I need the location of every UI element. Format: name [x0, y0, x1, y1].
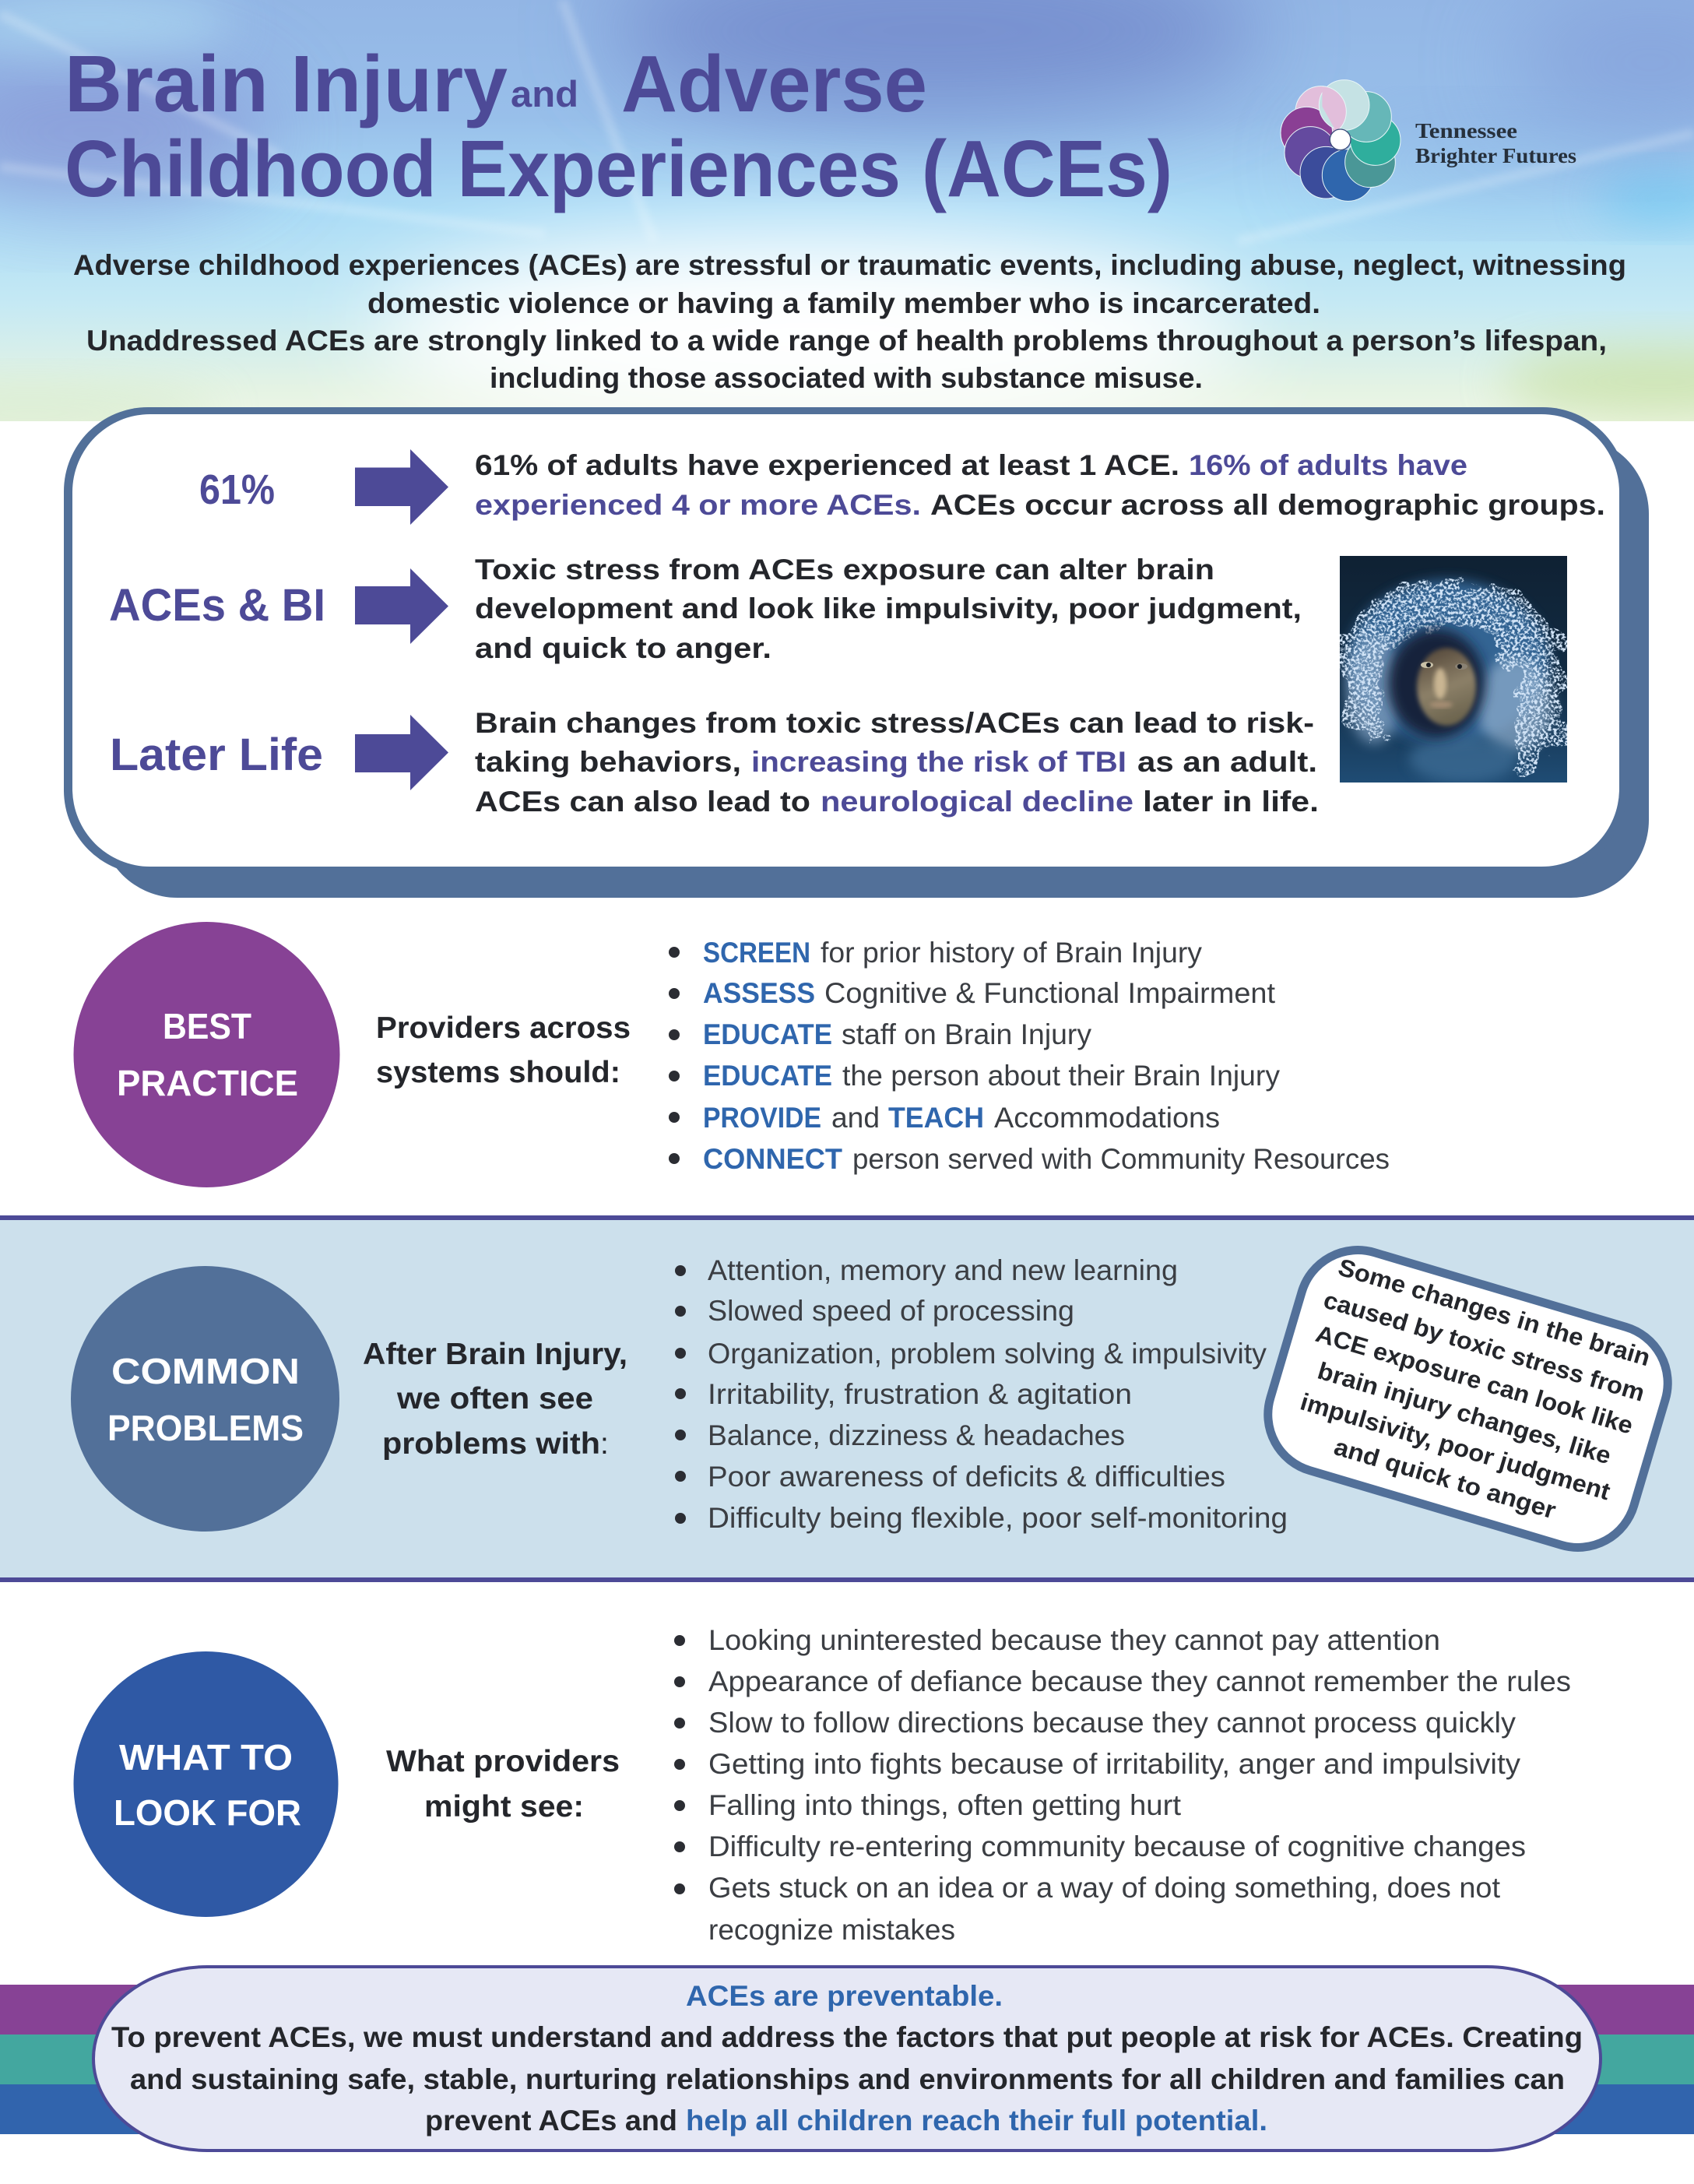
circle: common problems: PROBLEMS: [107, 1408, 304, 1448]
bullet list: Appearance of defiance because they cannot remember the rules: [708, 1665, 1571, 1697]
row: 61%: [199, 449, 1605, 525]
bullet list: Looking uninterested because they cannot pay attention: [708, 1624, 1440, 1656]
bullet list: the person about their Brain Injury: [842, 1060, 1280, 1092]
footer: colour stripes: [0, 1985, 1694, 2134]
bullet list: person served with Community Resources: [852, 1143, 1390, 1175]
bullet list: CONNECT: [703, 1143, 842, 1175]
bullet list: Slowed speed of processing: [708, 1295, 1074, 1327]
intro text: [73, 249, 1626, 394]
row text: development and look like impulsivity, poor judgment,: [475, 593, 1302, 624]
bullet list: staff on Brain Injury: [842, 1018, 1091, 1050]
footer callout: ACEs are preventable: ACEs are preventable.: [686, 1980, 1003, 2012]
callout: tilted note: impulsivity, poor judgment: [1297, 1388, 1613, 1505]
bullet list: [669, 937, 1390, 1175]
row text: [475, 554, 1302, 664]
footer callout: ACEs are preventable: To prevent ACEs, we must understand and address the factors that put people at risk for ACEs. Creating: [111, 2021, 1583, 2053]
footer callout: ACEs are preventable: and sustaining safe, stable, nurturing relationships and environments for all children and families can: [130, 2063, 1565, 2095]
row text: [475, 707, 1319, 818]
section: common problems: [0, 1215, 1694, 1582]
footer callout: ACEs are preventable: prevent ACEs and: [425, 2105, 677, 2137]
bullet list: Difficulty re-entering community because of cognitive changes: [708, 1831, 1526, 1862]
logo wordmark: Brighter Futures: [1415, 144, 1576, 167]
bullet list: Cognitive & Functional Impairment: [824, 977, 1276, 1009]
row text: experienced 4 or more ACEs.: [475, 489, 921, 521]
intro text: Unaddressed ACEs are strongly linked to a wide range of health problems throughout a person’s lifespan,: [86, 325, 1607, 357]
bullet list: PROVIDE: [703, 1102, 821, 1134]
footer callout: ACEs are preventable: help all children reach their full potential.: [686, 2105, 1267, 2137]
bullet list: Accommodations: [994, 1102, 1220, 1134]
logo: Tennessee Brighter Futures: [1281, 80, 1576, 201]
bullet list: Attention, memory and new learning: [708, 1254, 1178, 1286]
bullet list: and: [831, 1102, 880, 1134]
row text: ACEs occur across all demographic groups.: [930, 489, 1605, 521]
lead-in text: :: [600, 1427, 609, 1461]
row text: Toxic stress from ACEs exposure can alter brain: [475, 554, 1214, 586]
intro text: Adverse childhood experiences (ACEs) are stressful or traumatic events, including abuse, neglect, witnessing: [73, 249, 1626, 281]
lead-in text: we often see: [396, 1382, 593, 1416]
bullet list: EDUCATE: [703, 1060, 832, 1092]
bullet list: Organization, problem solving & impulsivity: [708, 1338, 1267, 1370]
row text: [475, 449, 1605, 521]
circle: common problems: [71, 1266, 339, 1532]
circle: best practice: [73, 922, 339, 1187]
lead-in text: [376, 1011, 631, 1089]
row text: as an adult.: [1137, 746, 1317, 778]
circle: best practice: PRACTICE: [117, 1063, 298, 1103]
callout: tilted note: and quick to anger: [1331, 1433, 1559, 1525]
lead-in text: Providers across: [376, 1011, 631, 1045]
row text: 16% of adults have: [1189, 449, 1467, 481]
row: Later Life: [110, 707, 1319, 818]
title: Adverse: [621, 39, 927, 128]
section: what to look for: [73, 1624, 1571, 1946]
section: best practice: [73, 922, 1390, 1187]
bullet list: [675, 1254, 1288, 1534]
bullet list: Falling into things, often getting hurt: [708, 1789, 1182, 1821]
callout: tilted note: [1254, 1236, 1682, 1562]
lead-in text: After Brain Injury,: [363, 1338, 627, 1371]
row text: 61% of adults have experienced at least 1 ACE.: [475, 449, 1179, 481]
row text: neurological decline: [821, 786, 1133, 818]
bullet list: Difficulty being flexible, poor self-monitoring: [708, 1502, 1288, 1534]
footer callout: ACEs are preventable: [93, 1967, 1601, 2151]
row text: ACEs can also lead to: [475, 786, 810, 818]
callout: tilted note: brain injury changes, like: [1315, 1357, 1614, 1469]
row text: taking behaviors,: [475, 746, 741, 778]
bullet list: Getting into fights because of irritability, anger and impulsivity: [708, 1748, 1521, 1780]
row text: Brain changes from toxic stress/ACEs can lead to risk-: [475, 707, 1314, 739]
row: 61%: 61%: [199, 466, 275, 513]
row: ACEs and BI: ACEs & BI: [109, 580, 325, 631]
row text: later in life.: [1143, 786, 1319, 818]
bullet list: recognize mistakes: [708, 1914, 955, 1946]
bullet list: [674, 1624, 1571, 1946]
bullet list: EDUCATE: [703, 1018, 832, 1050]
bullet list: for prior history of Brain Injury: [821, 937, 1202, 969]
circle: what to look for: WHAT TO: [119, 1737, 293, 1778]
circle: common problems: COMMON: [111, 1351, 300, 1391]
callout: tilted note: caused by toxic stress from: [1320, 1286, 1648, 1407]
bullet list: Poor awareness of deficits & difficulties: [708, 1461, 1225, 1493]
callout: tilted note: Some changes in the brain: [1335, 1254, 1654, 1371]
header background: [0, 0, 1694, 440]
arrow: [355, 568, 448, 644]
lead-in text: systems should:: [376, 1056, 620, 1089]
lead-in text: [386, 1745, 620, 1824]
title: Brain Injury: [65, 39, 508, 128]
row text: increasing the risk of TBI: [751, 746, 1126, 778]
circle: what to look for: [73, 1651, 338, 1917]
row: ACEs and BI: [109, 554, 1302, 664]
bullet list: Gets stuck on an idea or a way of doing something, does not: [708, 1872, 1501, 1904]
arrow: [355, 449, 448, 525]
circle: what to look for: LOOK FOR: [114, 1792, 301, 1833]
lead-in text: problems with: [382, 1427, 600, 1461]
callout: tilted note: ACE exposure can look like: [1313, 1320, 1636, 1440]
row: Later Life: Later Life: [110, 730, 323, 780]
bullet list: Balance, dizziness & headaches: [708, 1419, 1125, 1451]
bullet list: SCREEN: [703, 937, 810, 969]
logo wordmark: Tennessee: [1415, 119, 1517, 142]
lead-in text: [363, 1338, 627, 1461]
title: and: [511, 73, 578, 114]
photo: child surrounded by water splash: [1340, 556, 1567, 783]
title: [65, 39, 1172, 213]
bullet list: ASSESS: [703, 977, 815, 1009]
intro text: including those associated with substance misuse.: [490, 362, 1203, 394]
intro text: domestic violence or having a family member who is incarcerated.: [367, 287, 1320, 319]
lead-in text: What providers: [386, 1745, 620, 1778]
circle: best practice: BEST: [163, 1006, 251, 1046]
logo wordmark: [1415, 119, 1576, 167]
bullet list: TEACH: [888, 1102, 984, 1134]
lead-in text: might see:: [424, 1790, 584, 1824]
row text: and quick to anger.: [475, 632, 771, 664]
arrow: [355, 715, 448, 790]
title: Childhood Experiences (ACEs): [65, 124, 1172, 213]
panel: key facts: [64, 407, 1649, 898]
bullet list: Slow to follow directions because they cannot process quickly: [708, 1707, 1517, 1739]
bullet list: Irritability, frustration & agitation: [708, 1378, 1132, 1410]
icon: flower logo: [1281, 80, 1401, 201]
